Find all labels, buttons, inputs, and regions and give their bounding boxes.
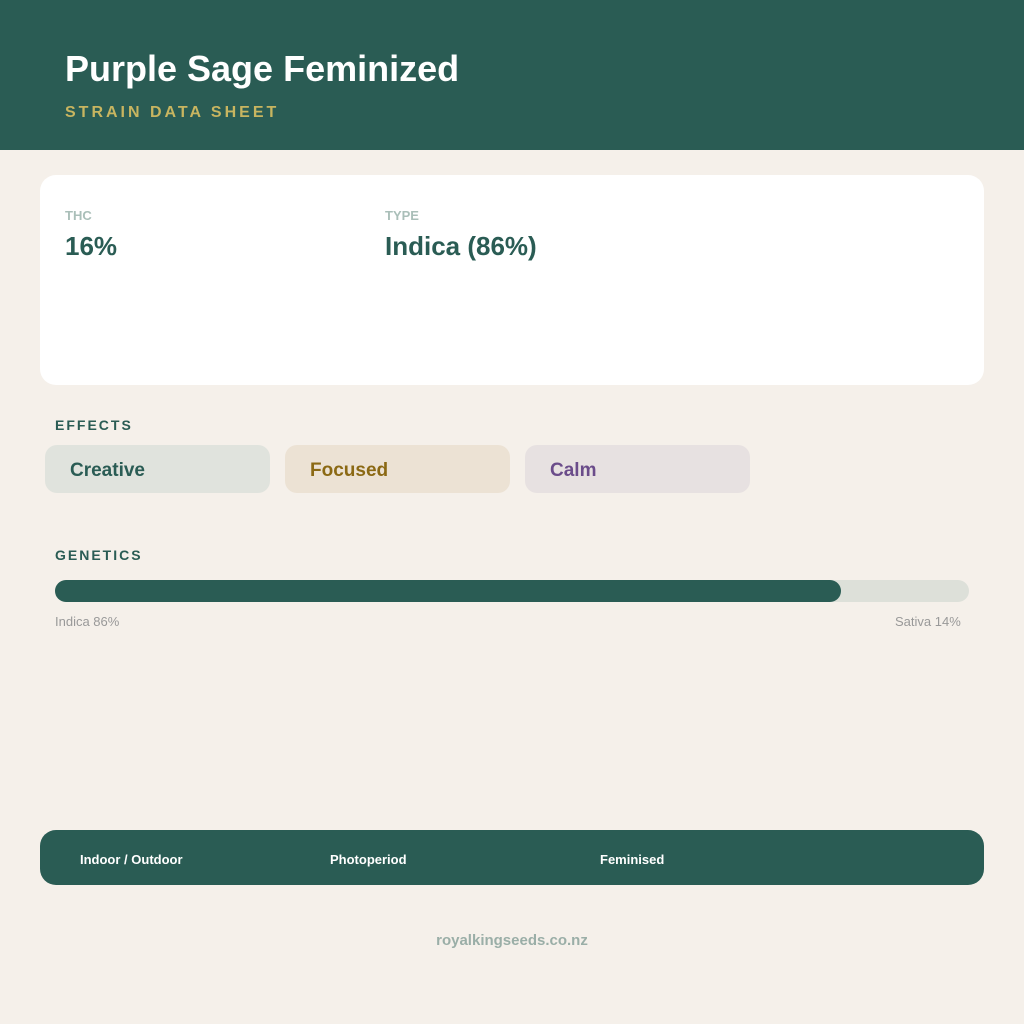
header banner xyxy=(0,0,1024,150)
chip text: Calm: Calm xyxy=(550,460,596,481)
subtitle: STRAIN DATA SHEET xyxy=(65,104,279,121)
stat label: THC: THC xyxy=(65,208,92,223)
attribute: Photoperiod: Photoperiod xyxy=(330,852,407,867)
attribute: Feminised: Feminised xyxy=(600,852,664,867)
bar label: Indica: Indica 86% xyxy=(55,614,119,629)
chip text: Creative: Creative xyxy=(70,460,145,481)
attribute: Indoor / Outdoor: Indoor / Outdoor xyxy=(80,852,183,867)
stat label: type: TYPE xyxy=(385,208,419,223)
effects heading: EFFECTS xyxy=(55,417,133,433)
panel: stats card xyxy=(40,175,984,385)
effect chip: Focused xyxy=(285,445,510,493)
footer attributes bar xyxy=(40,830,984,885)
bar fill: Indica 86% xyxy=(55,580,841,602)
genetics heading: GENETICS xyxy=(55,547,143,563)
genetics bar chart xyxy=(55,580,969,602)
website credit: royalkingseeds.co.nz xyxy=(436,932,588,949)
stat value: THC: 16% xyxy=(65,231,117,261)
effect chip: Creative xyxy=(45,445,270,493)
stat value: type: Indica (86%) xyxy=(385,231,537,261)
title: Purple Sage Feminized xyxy=(65,48,459,89)
chip text: Focused: Focused xyxy=(310,460,388,481)
effect chip: Calm xyxy=(525,445,750,493)
bar label: Sativa: Sativa 14% xyxy=(895,614,961,629)
